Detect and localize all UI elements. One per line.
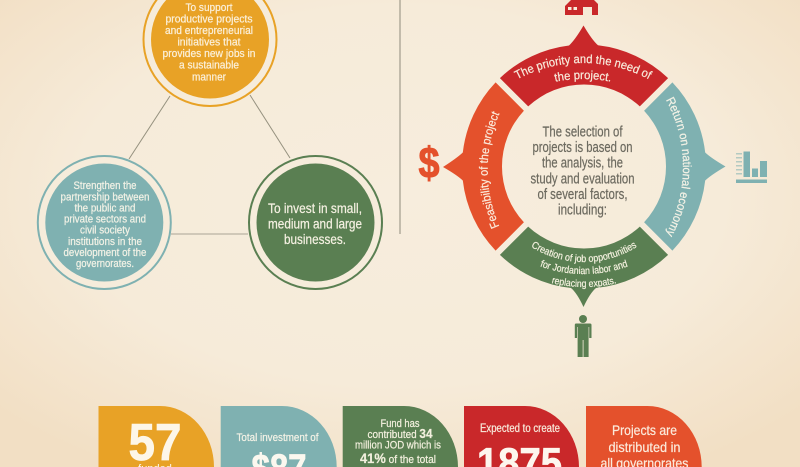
objective circle: invest in businesses: [249, 156, 382, 289]
ring segment: return on national economy: [644, 82, 726, 251]
stat card: jobs created: Expected to create: [480, 423, 560, 435]
stat card: total investment: [221, 406, 337, 467]
icon: person: [575, 315, 592, 357]
ring segment: feasibility: Feasibility of the project: [478, 111, 500, 229]
ring segment: return on national economy: Return on national economy: [666, 96, 692, 238]
objective circle: invest in businesses: medium and large: [268, 216, 362, 232]
objective circle: partnership: private sectors and: [64, 214, 146, 226]
stat card: governorates: Projects are: [612, 422, 677, 438]
objective circle: partnership: partnership between: [60, 191, 150, 203]
objective circle: partnership: Strengthen the: [74, 180, 136, 192]
objective circle: productive projects: a sustainable: [179, 60, 239, 72]
ring segment: priority and need: [500, 26, 668, 106]
stat card: governorates: [586, 406, 702, 467]
objective circle: productive projects: manner: [192, 72, 226, 84]
ring segment: job creation: replacing expats.: [552, 278, 616, 290]
objective circle: partnership: [38, 156, 171, 289]
stat card: fund contribution: million JOD which is: [355, 440, 441, 452]
objective circle: productive projects: [144, 0, 276, 106]
stat card: fund contribution: Fund has: [380, 418, 420, 430]
objective circle: productive projects: and entrepreneurial: [165, 25, 253, 37]
centre text: selection of projects: study and evaluation: [530, 171, 634, 187]
objective circle: partnership: institutions in the: [68, 236, 142, 248]
ring segment: feasibility: [443, 82, 524, 251]
ring segment: job creation: [500, 226, 668, 307]
ring segment: job creation: Creation of job opportunities: [532, 242, 636, 264]
objective circle: partnership: development of the: [64, 247, 146, 259]
stat card: fund contribution: contributed 34: [368, 426, 433, 441]
centre text: selection of projects: the analysis, the: [542, 156, 623, 172]
stat card: fund contribution: [343, 406, 458, 467]
objective circle: partnership: civil society: [80, 224, 130, 236]
objective circle: partnership: the public and: [74, 202, 136, 214]
centre text: selection of projects: including:: [558, 203, 607, 219]
stat card: governorates: distributed in: [608, 439, 680, 455]
objective circle: productive projects: To support: [186, 2, 232, 14]
icon: house: [565, 0, 598, 15]
objective circle: invest in businesses: To invest in small,: [268, 200, 362, 216]
objective circle: productive projects: provides new jobs in: [162, 48, 256, 60]
stat card: fund contribution: 41% of the total: [360, 450, 436, 466]
centre text: selection of projects: The selection of: [542, 124, 623, 140]
objective circle: productive projects: initiatives that: [178, 36, 240, 48]
centre text: selection of projects: projects is based on: [532, 140, 632, 156]
stat card: 57: [98, 406, 214, 467]
stat card: total investment: Total investment of: [236, 432, 319, 444]
icon: dollar sign: $: [418, 139, 440, 188]
ring segment: priority and need: the project.: [554, 70, 610, 82]
stat card: jobs created: [464, 406, 579, 467]
objective circle: invest in businesses: businesses.: [284, 231, 346, 247]
objective circle: partnership: governorates.: [76, 258, 134, 270]
ring segment: job creation: for Jordanian labor and: [540, 260, 628, 274]
ring segment: priority and need: The priority and the need of: [514, 54, 653, 79]
centre text: selection of projects: [530, 124, 634, 219]
centre text: selection of projects: of several factors,: [538, 187, 628, 203]
objective circle: productive projects: productive projects: [166, 14, 253, 26]
icon: bar chart: [736, 152, 767, 183]
